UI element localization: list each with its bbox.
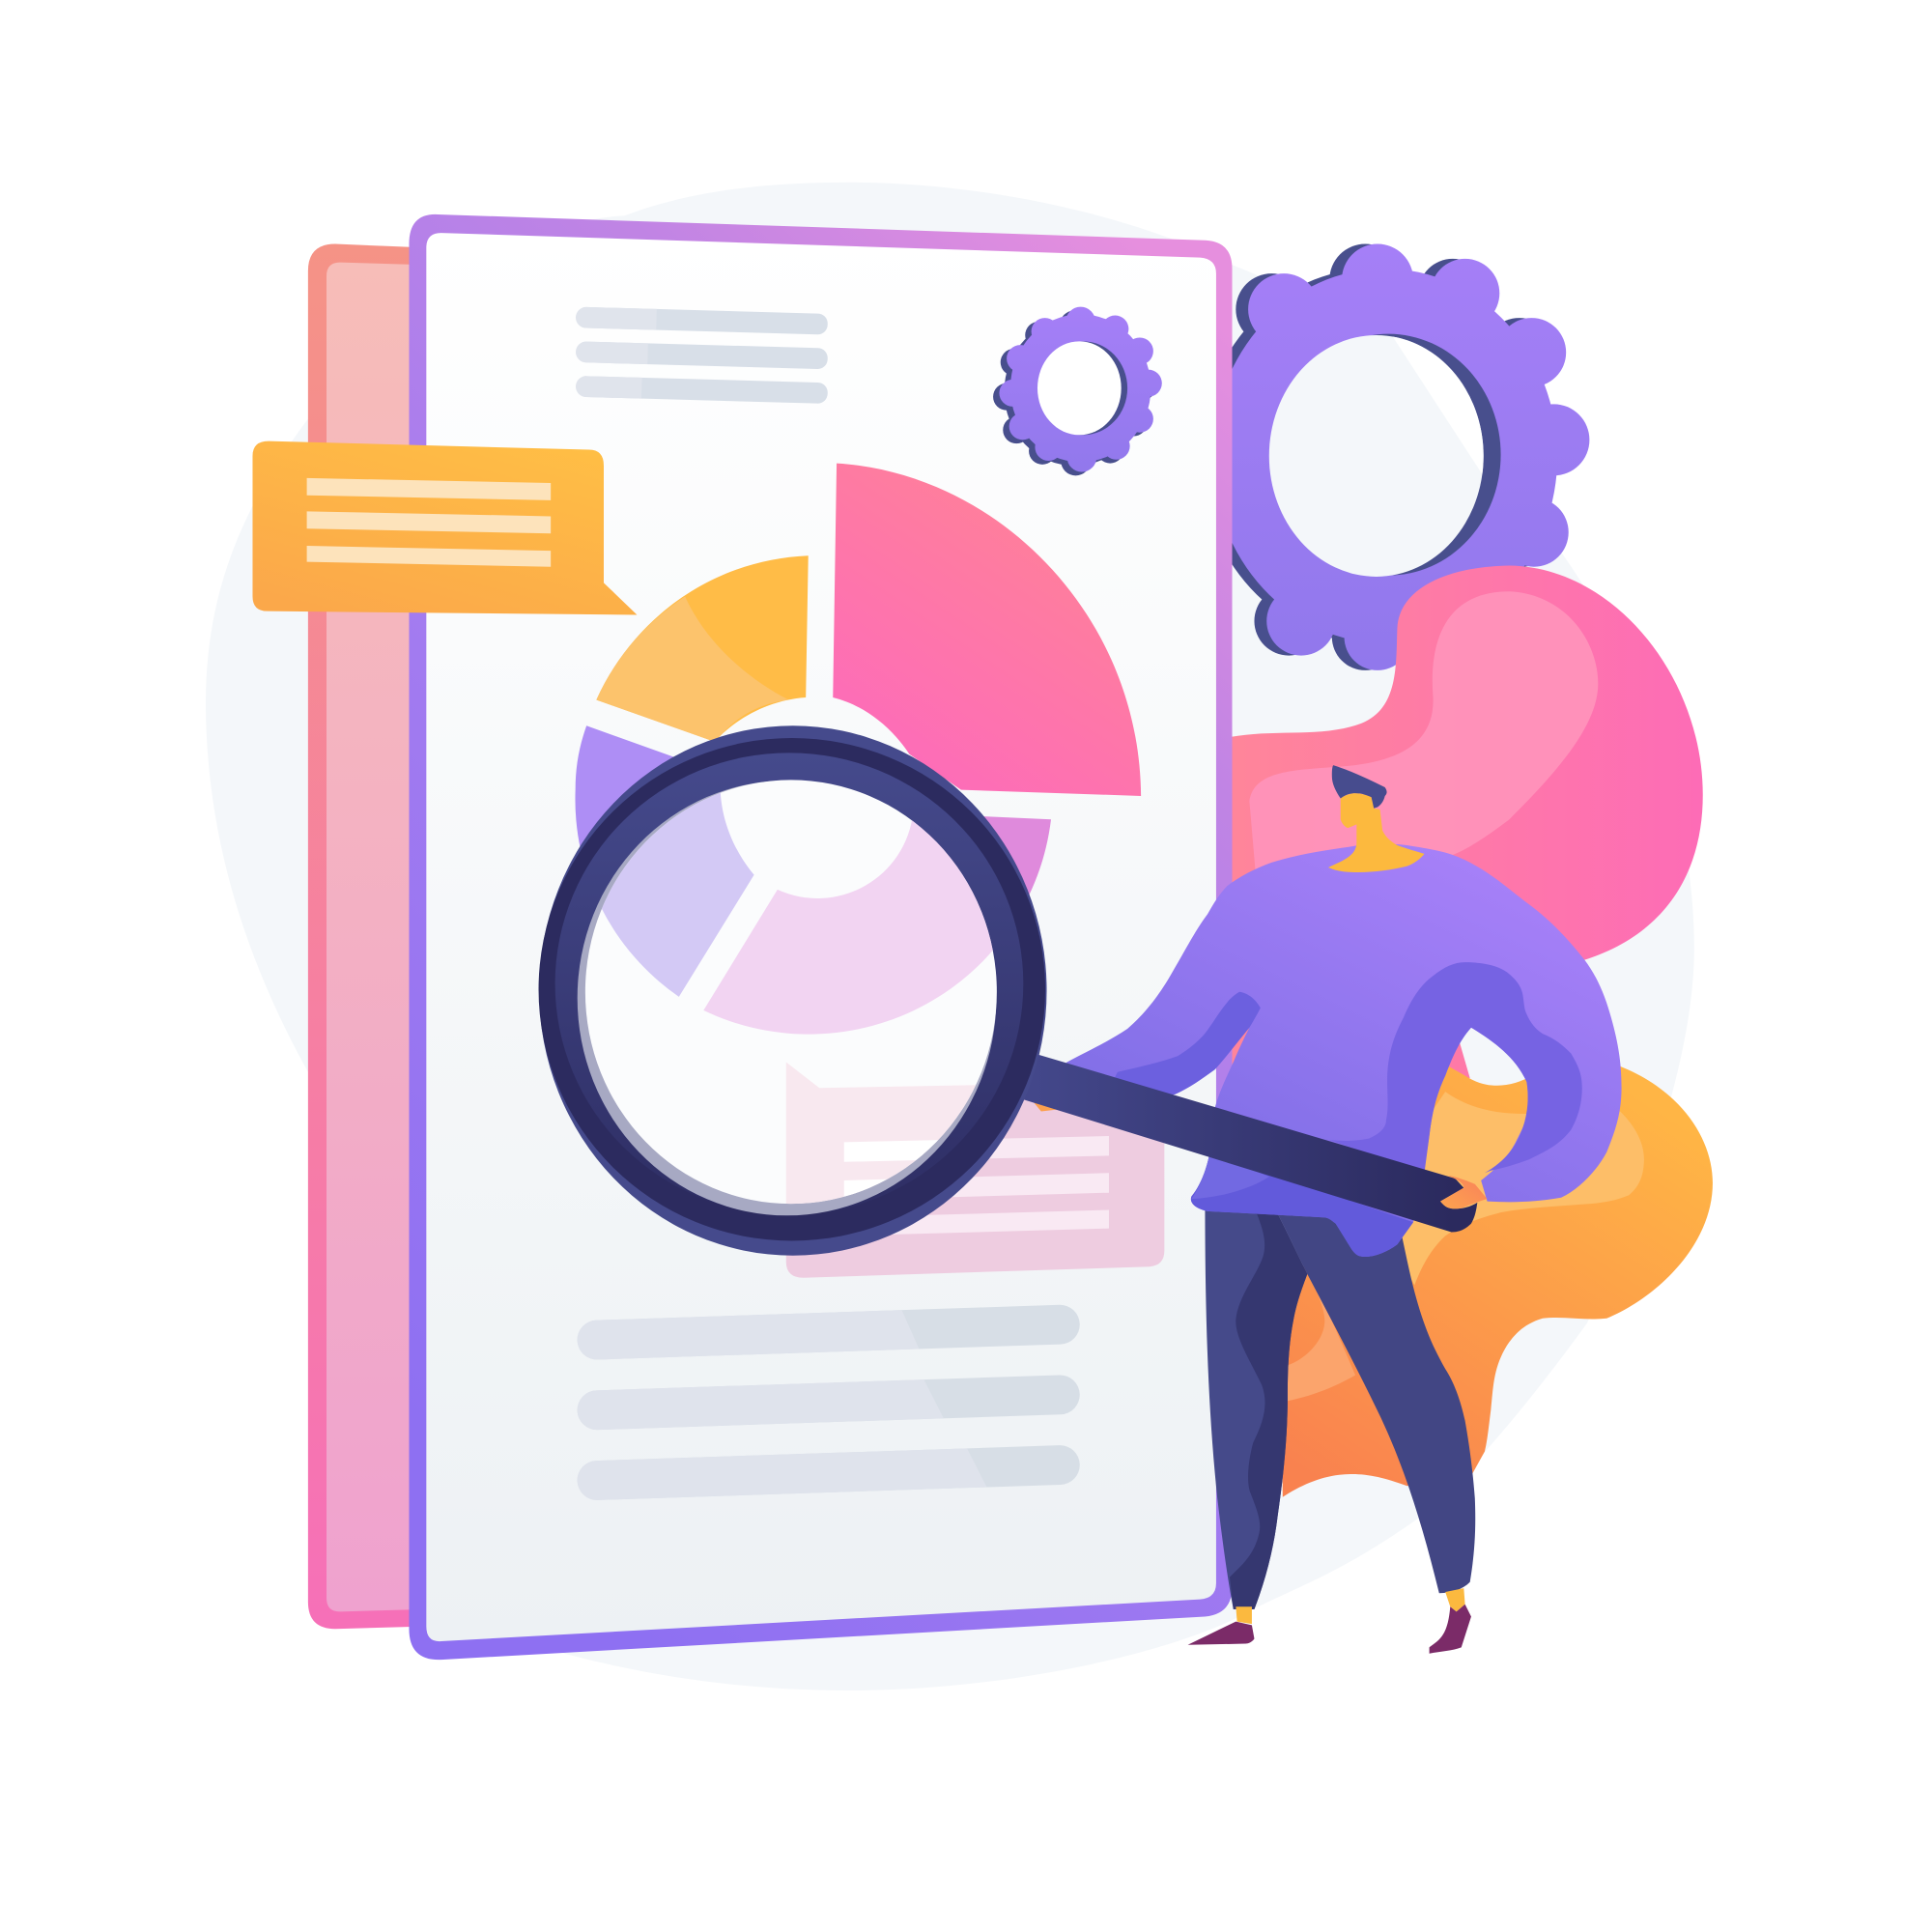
- left shoe: [1188, 1622, 1254, 1645]
- inner ring: [555, 753, 1023, 1215]
- illustration: analyst inspecting a report: [206, 183, 1713, 1690]
- lens shadow crescent: [578, 781, 996, 1215]
- hand: [1440, 1176, 1488, 1208]
- sweater hem: [1191, 1152, 1413, 1257]
- sweater: [1023, 843, 1622, 1257]
- lens contents: [602, 793, 993, 1204]
- socks: [1236, 1588, 1465, 1624]
- orange blob lighter fold: [1386, 1092, 1644, 1285]
- small gear icon: [993, 307, 1162, 475]
- pie slice: purple: [575, 725, 754, 997]
- orange blob fold between legs: [1288, 1275, 1355, 1401]
- pie slice: magenta: [703, 813, 1051, 1035]
- orange blob: [1282, 1063, 1713, 1497]
- pink note card: [786, 1062, 1164, 1278]
- left hand sliver: [1029, 1096, 1062, 1112]
- pie slice: orange lighter shade: [596, 596, 788, 742]
- outer ring: [539, 725, 1047, 1256]
- front document page: [409, 214, 1233, 1660]
- person: [1023, 765, 1622, 1654]
- pie slice: pink: [833, 464, 1141, 796]
- pie chart: [575, 464, 1141, 1035]
- magnifying glass: [539, 725, 1488, 1278]
- bottom text lines: [577, 1304, 1080, 1501]
- sweater arm fold right: [1329, 962, 1582, 1173]
- top text lines: [576, 307, 828, 404]
- pink blob: [1220, 565, 1703, 1078]
- orange speech note: [252, 441, 637, 614]
- hair: [1332, 765, 1387, 809]
- pie slice: orange: [596, 555, 809, 742]
- left leg: [1205, 1202, 1307, 1609]
- lens glass: [585, 780, 997, 1204]
- handle: [1024, 1055, 1477, 1233]
- large gear: [1233, 243, 1590, 670]
- left leg shade: [1230, 1213, 1307, 1609]
- sweater arm fold left: [1096, 992, 1261, 1115]
- sweater hem highlight: [1191, 1152, 1269, 1199]
- right leg: [1278, 1213, 1475, 1593]
- neck and collar: [1328, 793, 1424, 872]
- background blob: [206, 183, 1694, 1690]
- dark band: [539, 738, 1045, 1240]
- right shoe: [1430, 1605, 1471, 1654]
- back document page: [308, 244, 425, 1629]
